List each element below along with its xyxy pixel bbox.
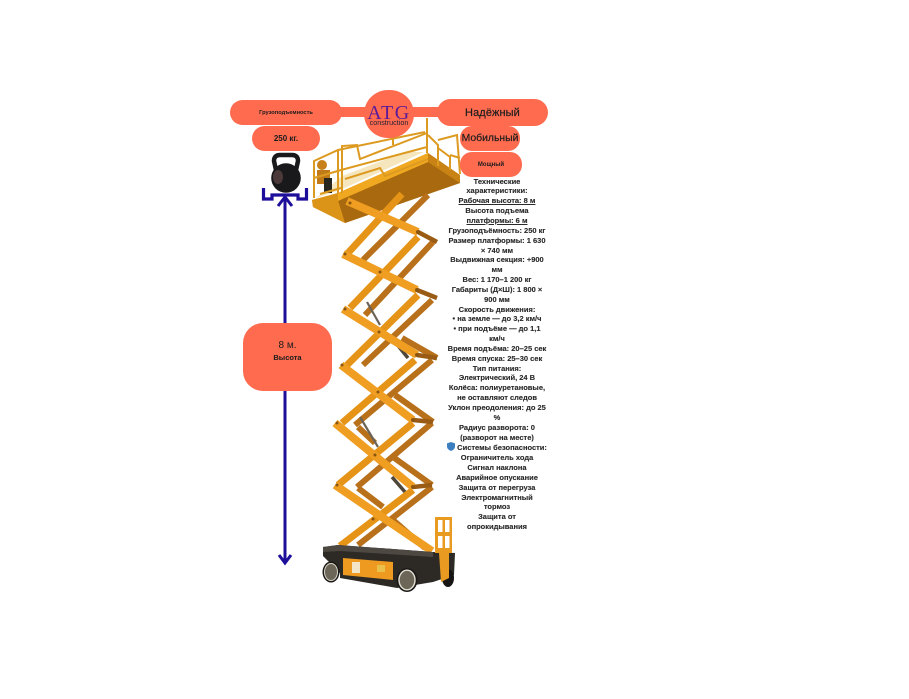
- connector band: [340, 107, 440, 117]
- text block: technical specifications: Время подъёма: 20–25 сек: [448, 344, 546, 353]
- rear scissor arms: [355, 195, 437, 548]
- text block: technical specifications: Размер платформы: 1 630: [448, 236, 546, 245]
- pill: load capacity value: 250 кг.: [274, 134, 298, 143]
- callout: height 8 m: Высота: [273, 353, 302, 362]
- pill: powerful: Мощный: [478, 162, 504, 168]
- callout: height 8 m: [243, 323, 332, 391]
- pill: load capacity label: Грузоподъемность: [259, 110, 313, 116]
- text block: technical specifications: Рабочая высота: 8 м: [459, 196, 535, 205]
- text block: technical specifications: Выдвижная секция: +900: [450, 255, 544, 264]
- pill: powerful: [460, 152, 522, 177]
- text block: technical specifications: [447, 177, 547, 531]
- platform control guard: [435, 517, 452, 582]
- text block: technical specifications: 900 мм: [484, 295, 510, 304]
- pill: mobile: [460, 126, 520, 151]
- text block: technical specifications: Защита от: [478, 512, 516, 521]
- text block: technical specifications: Аварийное опускание: [456, 473, 538, 482]
- text block: technical specifications: Вес: 1 170–1 200 кг: [463, 275, 531, 284]
- lift cylinders: [360, 302, 408, 492]
- text block: technical specifications: • при подъёме — до 1,1: [453, 324, 541, 333]
- text block: technical specifications: Электромагнитный: [461, 493, 533, 502]
- callout: height 8 m: 8 м.: [278, 340, 296, 351]
- text block: technical specifications: не оставляют следов: [457, 393, 537, 402]
- text block: technical specifications: Тип питания:: [473, 364, 521, 373]
- text block: technical specifications: Сигнал наклона: [467, 463, 527, 472]
- text block: technical specifications: Скорость движения:: [459, 305, 535, 314]
- scissor pins: [336, 202, 420, 520]
- text block: technical specifications: Время спуска: 25–30 сек: [452, 354, 542, 363]
- text block: technical specifications: км/ч: [489, 334, 505, 343]
- wheels: [322, 562, 454, 592]
- operator figure: [317, 160, 332, 193]
- platform: [312, 118, 460, 223]
- text block: technical specifications: (разворот на месте): [460, 433, 534, 442]
- text block: technical specifications: Защита от перегруза: [459, 483, 535, 492]
- text block: technical specifications: Габариты (Д×Ш): 1 800 ×: [452, 285, 542, 294]
- text block: technical specifications: характеристики:: [466, 186, 528, 195]
- text block: technical specifications: платформы: 6 м: [466, 216, 528, 225]
- pill: reliable: Надёжный: [465, 106, 520, 118]
- text block: technical specifications: Колёса: полиуретановые,: [449, 383, 545, 392]
- pill: load capacity value: [252, 126, 320, 151]
- text block: technical specifications: Радиус разворота: 0: [459, 423, 535, 432]
- text block: technical specifications: × 740 мм: [481, 246, 513, 254]
- text block: technical specifications: • на земле — до 3,2 км/ч: [453, 314, 541, 323]
- logo circle: ATG construction: [364, 90, 414, 138]
- text block: technical specifications: тормоз: [484, 502, 510, 511]
- text block: technical specifications: мм: [491, 265, 503, 274]
- text block: technical specifications: Грузоподъёмность: 250 кг: [448, 226, 546, 235]
- chassis: [322, 517, 455, 592]
- pill: reliable: [437, 99, 548, 126]
- logo circle: ATG construction: construction: [370, 118, 408, 127]
- text block: technical specifications: Высота подъема: [465, 206, 529, 215]
- text block: technical specifications: %: [494, 413, 500, 422]
- pill: mobile: Мобильный: [462, 133, 518, 144]
- text block: technical specifications: Системы безопасности:: [457, 443, 547, 452]
- front scissor arms: [338, 194, 418, 546]
- text block: technical specifications: Электрический, 24 В: [459, 373, 535, 382]
- text block: technical specifications: опрокидывания: [467, 522, 527, 531]
- railings: [314, 118, 460, 198]
- pill: load capacity label: [230, 100, 342, 125]
- text block: technical specifications: Ограничитель хода: [461, 453, 533, 462]
- rear arm end links: [413, 232, 437, 487]
- text block: technical specifications: Технические: [474, 177, 520, 186]
- text block: technical specifications: Уклон преодоления: до 25: [448, 403, 546, 412]
- logo circle: ATG construction: ATG: [367, 102, 411, 124]
